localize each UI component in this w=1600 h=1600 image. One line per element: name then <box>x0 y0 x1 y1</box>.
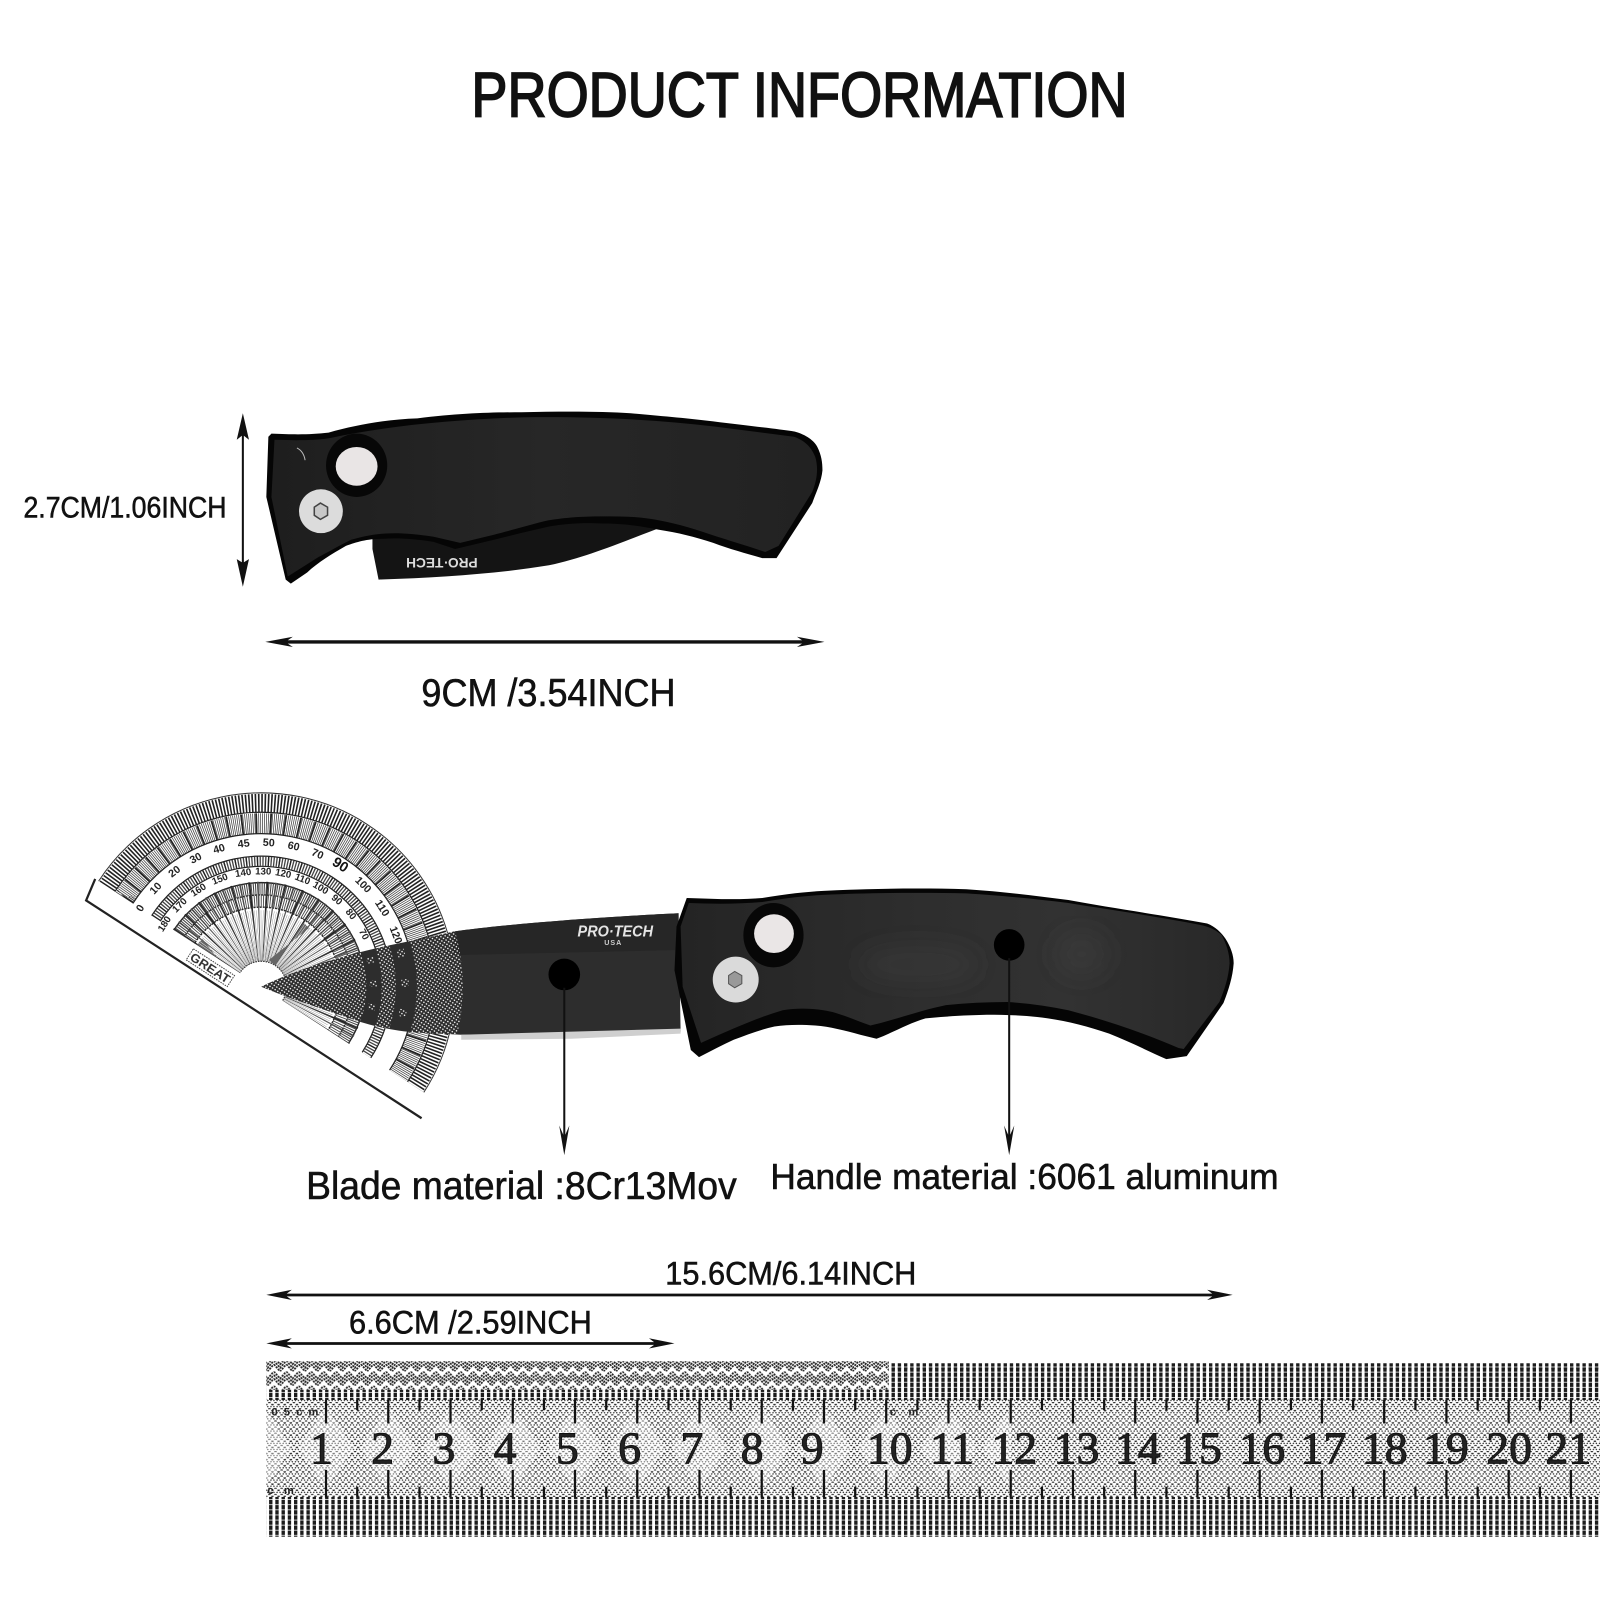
ruler unit marks: cm <box>890 1406 918 1418</box>
ruler numerals: 19 <box>1423 1422 1469 1473</box>
length label: 9CM /3.54INCH <box>421 672 676 715</box>
icon: protractor <box>84 792 450 1120</box>
outer degree numbers: 45 <box>237 837 250 851</box>
outer degree ticks <box>100 794 448 1092</box>
blade logo, upside down: PRO·TECH <box>406 554 478 570</box>
ruler numerals: 15 <box>1176 1422 1222 1473</box>
ruler numerals: 9 <box>801 1422 824 1473</box>
outer degree numbers: 90 <box>329 854 351 876</box>
blade length arrow <box>266 1338 674 1348</box>
panel: length dimensions <box>266 1255 1233 1348</box>
inner degree numbers: 160 <box>189 881 209 900</box>
title: PRODUCT INFORMATION <box>471 60 1128 130</box>
handle <box>674 889 1234 1059</box>
outer box band <box>116 813 428 1082</box>
inner degree numbers: 100 <box>311 880 330 897</box>
ruler numerals: 21 <box>1545 1422 1591 1473</box>
height label: 2.7CM/1.06INCH <box>23 491 227 524</box>
blade <box>261 913 681 1040</box>
ruler numerals: 16 <box>1239 1422 1285 1473</box>
handle <box>266 412 822 584</box>
handle material label: Handle material :6061 aluminum <box>770 1157 1279 1197</box>
ruler numerals: 1 <box>310 1422 333 1473</box>
push button <box>743 903 804 967</box>
blade material marker and arrow <box>548 959 580 1155</box>
protractor seen through blade <box>262 931 463 1034</box>
ruler bottom scale <box>266 1497 1600 1537</box>
outer degree numbers: 30 <box>188 851 204 867</box>
blade logo: USA <box>604 939 622 947</box>
inner degree numbers: 180 <box>156 914 174 934</box>
ruler numerals: 7 <box>680 1422 703 1473</box>
ruler numerals: 10 <box>867 1422 913 1473</box>
inner degree numbers: 120 <box>274 867 292 881</box>
inner degree numbers: 110 <box>293 872 312 888</box>
outer degree numbers <box>134 777 443 1053</box>
outer degree numbers: 20 <box>166 863 183 880</box>
total length arrow <box>266 1290 1233 1300</box>
inner degree numbers: 150 <box>211 872 230 888</box>
outer degree numbers: 50 <box>262 837 275 849</box>
outer degree numbers: 120 <box>387 925 404 946</box>
folded blade <box>372 510 663 580</box>
inner box band <box>152 856 385 1058</box>
ruler numerals <box>314 1432 1590 1464</box>
handle wear marks <box>857 932 1108 983</box>
ruler unit marks <box>267 1406 918 1497</box>
ruler mid band <box>266 1399 1600 1497</box>
inner degree numbers: 90 <box>329 892 344 908</box>
outer degree numbers: 130 <box>396 954 411 974</box>
ruler numerals: 13 <box>1054 1422 1099 1473</box>
inner degree numbers: 80 <box>343 907 358 922</box>
handle material marker and arrow <box>994 929 1024 1155</box>
height arrow <box>237 413 249 587</box>
ruler numerals: 4 <box>494 1422 517 1473</box>
fan rings and spokes <box>173 882 360 1044</box>
ruler numerals: 5 <box>556 1422 579 1473</box>
inner degree numbers: 140 <box>234 867 252 880</box>
ruler numerals: 17 <box>1301 1422 1346 1473</box>
ruler tick marks <box>325 1405 1600 1492</box>
inner degree numbers: 60 <box>365 950 379 964</box>
ruler numerals: 2 <box>371 1422 394 1473</box>
closed knife <box>266 412 822 584</box>
ruler numerals: 6 <box>618 1422 641 1473</box>
length arrow <box>265 637 824 647</box>
ruler unit marks: 0 5 c m <box>271 1406 318 1418</box>
outer degree numbers: 100 <box>352 874 374 896</box>
inner degree numbers: 70 <box>356 927 371 942</box>
ruler top scale <box>266 1361 1600 1400</box>
inner degree numbers: 130 <box>255 866 271 878</box>
outer degree numbers: 70 <box>310 847 325 862</box>
inner degree numbers: 170 <box>170 896 190 915</box>
ruler numerals: 11 <box>930 1422 974 1473</box>
panel: closed knife with dimensions <box>23 412 824 715</box>
ruler unit marks: cm <box>267 1485 294 1497</box>
ruler numerals: 8 <box>741 1422 764 1473</box>
outer degree numbers: 60 <box>286 839 301 854</box>
blade edge highlight <box>461 1029 681 1040</box>
protractor maker label: GREAT <box>187 950 233 987</box>
ruler numerals: 14 <box>1115 1422 1161 1473</box>
total length label: 15.6CM/6.14INCH <box>665 1255 916 1292</box>
hex screw <box>299 489 343 533</box>
blade material label: Blade material :8Cr13Mov <box>306 1165 737 1208</box>
ruler <box>266 1361 1600 1537</box>
inner degree numbers <box>156 820 398 1040</box>
ruler numerals: 20 <box>1486 1422 1532 1473</box>
ruler numerals: 3 <box>432 1422 455 1473</box>
blade length label: 6.6CM /2.59INCH <box>349 1304 592 1341</box>
blade logo: PRO·TECH <box>578 924 654 941</box>
push button <box>326 434 387 497</box>
outer degree numbers: 10 <box>148 880 165 897</box>
ruler numerals: 18 <box>1362 1422 1408 1473</box>
outer degree numbers: 110 <box>372 898 392 919</box>
panel: open knife with materials <box>261 888 1276 1200</box>
outer degree numbers: 40 <box>212 842 227 857</box>
outer degree numbers: 0 <box>134 903 147 914</box>
ruler numerals: 12 <box>991 1422 1037 1473</box>
hex screw <box>713 957 759 1003</box>
